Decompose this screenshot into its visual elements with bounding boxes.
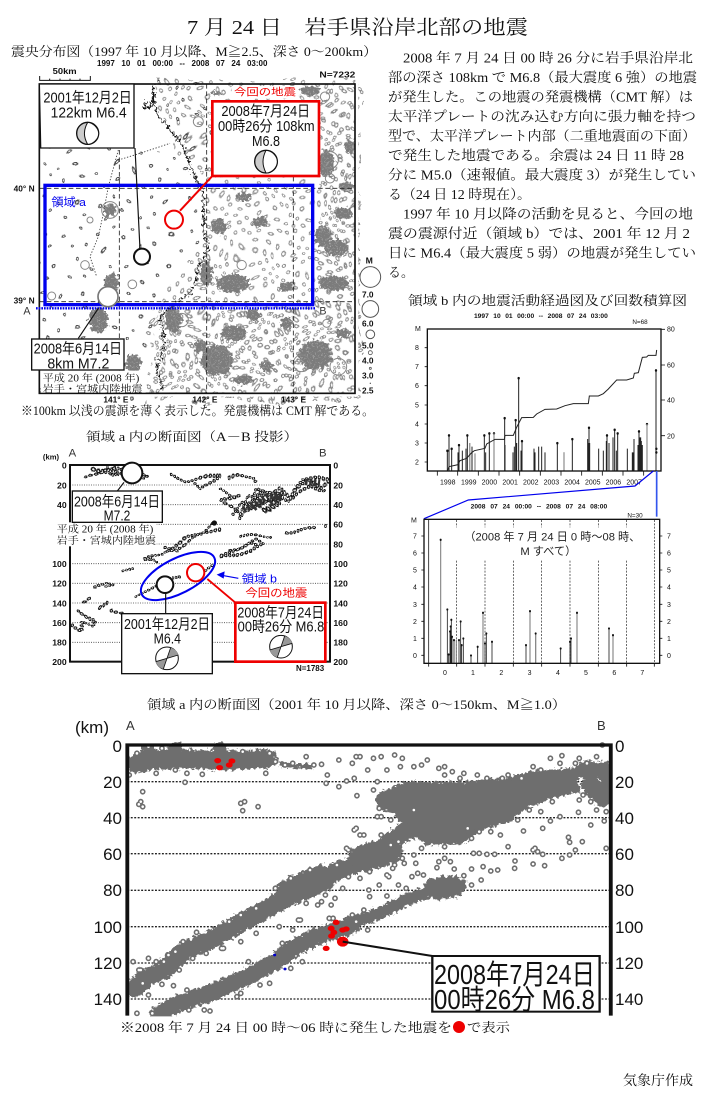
text block: explanation: る。 (388, 265, 414, 280)
lower chart axis labels: 0 (413, 653, 417, 660)
callout: 2008 June earthquake: 2008年6月14日 (34, 341, 122, 358)
upper chart axis labels: 2002 (523, 479, 539, 486)
lower chart axis labels: 3 (413, 602, 417, 609)
depth axis labels: 160 (52, 618, 67, 628)
callout: this earthquake: M6.8 (252, 133, 280, 150)
white patch under Iwate-Miyagi label (41, 371, 146, 393)
white margins of cross section (50, 462, 347, 664)
lower chart caption: M すべて） (520, 545, 576, 558)
magnitude legend: 2.5 (362, 386, 374, 396)
callout: this earthquake: 2008年7月24日 (237, 605, 324, 622)
lower chart axis labels: 4 (556, 670, 560, 677)
depth axis labels: 100 (52, 559, 67, 569)
endpoint A and B labels: A (23, 306, 31, 318)
depth axis labels: 200 (333, 657, 348, 667)
scattered hypocentre rings (129, 745, 610, 1013)
depth axis labels: 160 (333, 618, 348, 628)
lower chart axis labels: 0 (443, 670, 447, 677)
depth axis labels: 40 (103, 809, 122, 828)
map heading: 震央分布図（1997 年 10 月以降、M≧2.5、深さ 0～200km） (11, 44, 377, 59)
endpoint labels (69, 447, 327, 459)
leader line (343, 942, 432, 956)
endpoint labels: A (126, 718, 135, 733)
depth axis labels: 120 (52, 579, 67, 589)
map axis labels: 40° N (14, 183, 35, 193)
magnitude legend: 3.0 (362, 370, 374, 380)
depth axis labels: 20 (57, 480, 67, 490)
white margin around map (0, 80, 358, 400)
lower chart axis labels: 1 (413, 636, 417, 643)
lower chart caption (464, 530, 640, 558)
lower chart axis labels: 5 (413, 568, 417, 575)
depth axis labels: 80 (333, 539, 343, 549)
upper chart axis labels: M (415, 326, 421, 333)
callout: June 2008 earthquake (72, 491, 162, 525)
upper chart axis labels: 8 (415, 345, 419, 352)
callout: this earthquake: 2008年7月24日 (221, 103, 310, 120)
coastline (145, 85, 209, 390)
depth axis labels: 140 (52, 598, 67, 608)
text block: explanation: 2008 年 7 月 24 日 00 時 26 分に岩手県沿岸北 (403, 50, 693, 66)
panel: cross section A-B (43, 429, 348, 674)
depth axis labels: 0 (62, 460, 67, 470)
text block: explanation: 日に M6.4（最大震度 5 弱）の地震が発生してい (388, 244, 696, 260)
depth axis labels: 100 (94, 918, 122, 937)
endpoint A and B labels: B (319, 306, 326, 318)
text block: explanation: が発生した。この地震の発震機構（CMT 解）は (388, 88, 693, 104)
region a rectangle (45, 185, 313, 305)
callout: this earthquake (235, 603, 325, 662)
magnitude legend: 7.0 (362, 289, 374, 299)
depth axis labels: 100 (615, 918, 643, 937)
map plot area (0, 66, 381, 405)
magnitude legend: 4.0 (362, 356, 374, 366)
depth axis labels: (km) (43, 452, 60, 461)
map note: ※100km 以浅の震源を薄く表示した。発震機構は CMT 解である。 (21, 403, 374, 418)
region a label: 領域 a (51, 195, 87, 209)
depth axis labels: 0 (333, 460, 338, 470)
depth axis labels: 20 (103, 773, 122, 792)
section note: で表示 (467, 1020, 511, 1035)
Iwate-Miyagi label (43, 372, 143, 396)
lower chart axis labels: 0 (667, 653, 671, 660)
upper chart axis labels: 1999 (461, 479, 477, 486)
hour guide lines (457, 520, 654, 663)
large event rings (48, 92, 347, 375)
depth grid (127, 782, 611, 999)
lower chart axis labels: 6 (667, 551, 671, 558)
Iwate-Miyagi label (55, 522, 157, 547)
upper chart axis labels: 1998 (440, 479, 456, 486)
text block: explanation: 分に M5.0（速報値。最大震度 3）が発生してい (388, 166, 696, 182)
depth axis labels: 180 (52, 638, 67, 648)
lower chart axis labels: 1 (471, 670, 475, 677)
text block: explanation: る（24 日 12 時現在）。 (388, 186, 531, 202)
upper chart axis labels: 2005 (585, 479, 601, 486)
lower chart caption: （2008 年 7 月 24 日 0 時～08 時、 (464, 530, 640, 544)
depth grid (70, 485, 330, 642)
upper chart axis labels: 80 (667, 327, 675, 334)
depth axis labels: 120 (94, 954, 122, 973)
grid lines (39, 84, 355, 393)
detailed section heading: 領域 a 内の断面図（2001 年 10 月以降、深さ 0～150km、M≧1.0） (147, 697, 566, 712)
upper chart axis labels (415, 326, 675, 486)
lower chart axis labels: 6 (612, 670, 616, 677)
map frame (39, 84, 355, 393)
callout: 2008 June earthquake (32, 339, 124, 372)
region b ellipse (134, 542, 222, 610)
callout: this earthquake: 00時26分 M6.8 (434, 984, 595, 1015)
red aftershocks of this event (214, 758, 350, 951)
Iwate-Miyagi label: 岩手・宮城内陸地震 (57, 534, 156, 547)
hypocentre scatter (73, 467, 328, 633)
depth axis labels: 140 (333, 598, 348, 608)
depth axis labels: 80 (103, 881, 122, 900)
endpoint A and B labels (23, 306, 326, 318)
depth axis labels: 100 (333, 559, 348, 569)
lower chart axis labels: 2 (499, 670, 503, 677)
endpoint labels: A (69, 447, 77, 459)
panel: detailed cross section (75, 697, 660, 1036)
lower chart axis labels: 7 (413, 534, 417, 541)
depth axis labels (94, 737, 643, 1009)
lower chart count: N=30 (627, 513, 643, 520)
text block: explanation: で発生した地震である。余震は 24 日 11 時 28 (388, 147, 684, 163)
callout: this earthquake: 00時26分 M6.8 (238, 619, 324, 636)
magnitude legend: 6.0 (362, 318, 374, 328)
text block: explanation: 太平洋プレートの沈み込む方向に張力軸を持つ (388, 108, 696, 124)
endpoint labels (126, 718, 606, 733)
section note: ※2008 年 7 月 24 日 00 時～06 時に発生した地震を (120, 1020, 452, 1035)
upper chart axis labels: 2003 (544, 479, 559, 486)
zoom connector lines (424, 471, 657, 519)
callout: 2001 earthquake: 122km M6.4 (51, 104, 127, 121)
callout: June 2008 earthquake: 2008年6月14日 (74, 494, 160, 511)
hypocentre markers (134, 249, 150, 265)
upper magnitude bars (447, 370, 656, 471)
lower chart axis labels: 5 (667, 568, 671, 575)
leader lines (78, 148, 140, 338)
panel: epicentre map (0, 44, 381, 418)
cross section sample count: N=1783 (296, 664, 325, 673)
depth axis labels: 40 (615, 809, 634, 828)
callout: 2001 earthquake (122, 614, 212, 674)
map axis labels: 142° E (192, 395, 218, 405)
cross section frame (70, 465, 330, 662)
cumulative count line (447, 350, 657, 471)
red current earthquake label: 今回の地震 (245, 586, 307, 600)
section frame (127, 745, 611, 1016)
depth axis labels: 20 (615, 773, 634, 792)
map scale bar: 50km (53, 66, 77, 76)
depth axis labels (43, 452, 348, 667)
map sample count: N=7232 (319, 69, 356, 79)
upper chart axis labels: 2006 (606, 479, 621, 486)
lower chart axis labels: M (411, 517, 417, 524)
text block: explanation: 部の深さ 108km で M6.8（最大震度 6 強）の地震 (388, 69, 697, 85)
lower chart axis labels (411, 517, 671, 677)
callout: this earthquake: 今回の地震 (234, 86, 296, 99)
upper chart axis labels: 6 (415, 383, 419, 390)
callout: 2001 earthquake: 2001年12月2日 (124, 616, 210, 633)
upper chart axis labels: 2004 (564, 479, 580, 486)
depth axis labels: 140 (94, 990, 122, 1009)
depth axis labels: 40 (57, 500, 67, 510)
depth axis labels: 200 (52, 657, 67, 667)
time series heading: 領域 b 内の地震活動経過図及び回数積算図 (408, 293, 687, 308)
upper chart axis labels: 2 (415, 459, 419, 466)
endpoint labels: B (597, 718, 606, 733)
map axis labels (14, 183, 307, 405)
depth axis labels: 0 (615, 737, 624, 756)
magnitude legend: M (366, 255, 373, 265)
white margins around section (98, 742, 660, 1036)
callout: this earthquake (212, 86, 319, 176)
upper chart axis labels: 4 (415, 421, 419, 428)
upper chart period: 1997 10 01 00:00 -- 2008 07 24 03:00 (474, 313, 608, 320)
depth axis labels: 80 (615, 881, 634, 900)
lower chart axis labels: 4 (413, 585, 417, 592)
map axis labels: 143° E (281, 395, 307, 405)
text block: explanation: 震の震源付近（領域 b）では、2001 年 12 月 2 (388, 225, 690, 241)
credit: 気象庁作成 (623, 1072, 694, 1088)
depth axis labels: 60 (333, 520, 343, 530)
cross section heading: 領域 a 内の断面図（A－B 投影） (86, 429, 298, 444)
magnitude legend: 5.0 (362, 340, 374, 350)
callout: June 2008 earthquake: M7.2 (104, 509, 130, 525)
callout: this earthquake: 00時26分 108km (218, 118, 315, 135)
lower chart axis labels: 2 (667, 619, 671, 626)
grey aftershock clusters (88, 86, 356, 385)
depth axis labels: 120 (615, 954, 643, 973)
callout: region b arrow (217, 571, 277, 585)
blue markers (275, 955, 285, 969)
lower chart period: 2008 07 24 00:00 -- 2008 07 24 08:00 (471, 504, 607, 511)
title: 7 月 24 日 岩手県沿岸北部の地震 (187, 16, 528, 39)
lower chart axis labels: 6 (413, 551, 417, 558)
text block: explanation: 型で、太平洋プレート内部（二重地震面の下面） (388, 128, 696, 144)
panel: time series for region b (408, 293, 687, 677)
leader lines (117, 482, 166, 614)
lower chart axis labels: 2 (413, 619, 417, 626)
upper chart axis labels: 20 (667, 433, 675, 440)
upper chart axis labels: 2000 (482, 479, 497, 486)
callout: 2001 earthquake: M6.4 (154, 631, 181, 647)
depth axis labels: 180 (333, 638, 348, 648)
callout: 2008 June earthquake: 8km M7.2 (47, 355, 109, 372)
depth axis labels: 20 (333, 480, 343, 490)
callout: 2001 earthquake (39, 84, 134, 148)
endpoint labels: B (319, 447, 327, 459)
magnitude legend (360, 255, 381, 396)
callout: region b arrow: 領域 b (242, 571, 277, 585)
lower chart axis labels: 3 (528, 670, 532, 677)
Iwate-Miyagi label: 平成 20 年 (2008 年) (43, 372, 139, 385)
depth axis labels: 140 (615, 990, 643, 1009)
callout: this earthquake (434, 959, 595, 1015)
depth axis labels: 120 (333, 579, 348, 589)
lower magnitude bars (429, 520, 613, 663)
map scale bar (40, 66, 90, 80)
lower chart axis labels: 7 (640, 670, 644, 677)
earthquake markers (122, 463, 204, 593)
map axis labels: 39° N (14, 295, 35, 305)
upper chart frame and axes (427, 329, 661, 471)
Iwate-Miyagi label: 岩手・宮城内陸地震 (43, 383, 143, 396)
upper chart axis labels: 3 (415, 440, 419, 447)
callout: this earthquake: 2008年7月24日 (434, 959, 595, 990)
grey hypocentre bands (135, 748, 610, 1015)
lower chart axis labels: 1 (667, 636, 671, 643)
map axis labels: 141° E (103, 395, 129, 405)
depth axis labels: 60 (615, 845, 634, 864)
upper chart axis labels: 2001 (502, 479, 518, 486)
Iwate-Miyagi label: 平成 20 年 (2008 年) (57, 522, 153, 535)
depth axis labels: 40 (333, 500, 343, 510)
lower chart frame and axes (424, 519, 660, 663)
depth axis labels: 0 (113, 737, 122, 756)
upper chart axis labels: 40 (667, 398, 675, 405)
upper chart axis labels: 2007 (626, 479, 642, 486)
lower chart axis labels: 7 (667, 534, 671, 541)
upper chart count: N=68 (632, 319, 648, 326)
upper chart axis labels: 5 (415, 402, 419, 409)
map period label: 1997 10 01 00:00 -- 2008 07 24 03:00 (97, 59, 268, 68)
depth axis labels: 60 (103, 845, 122, 864)
text block: explanation: 1997 年 10 月以降の活動を見ると、今回の地 (403, 206, 693, 222)
upper chart axis labels: 60 (667, 362, 675, 369)
km unit label: (km) (75, 718, 109, 737)
callout: 2001 earthquake: 2001年12月2日 (43, 90, 132, 107)
text block: explanation (388, 50, 697, 280)
lower chart axis labels: 4 (667, 585, 671, 592)
lower chart axis labels: 3 (667, 602, 671, 609)
lower chart axis labels: 5 (584, 670, 588, 677)
upper chart axis labels: 7 (415, 364, 419, 371)
